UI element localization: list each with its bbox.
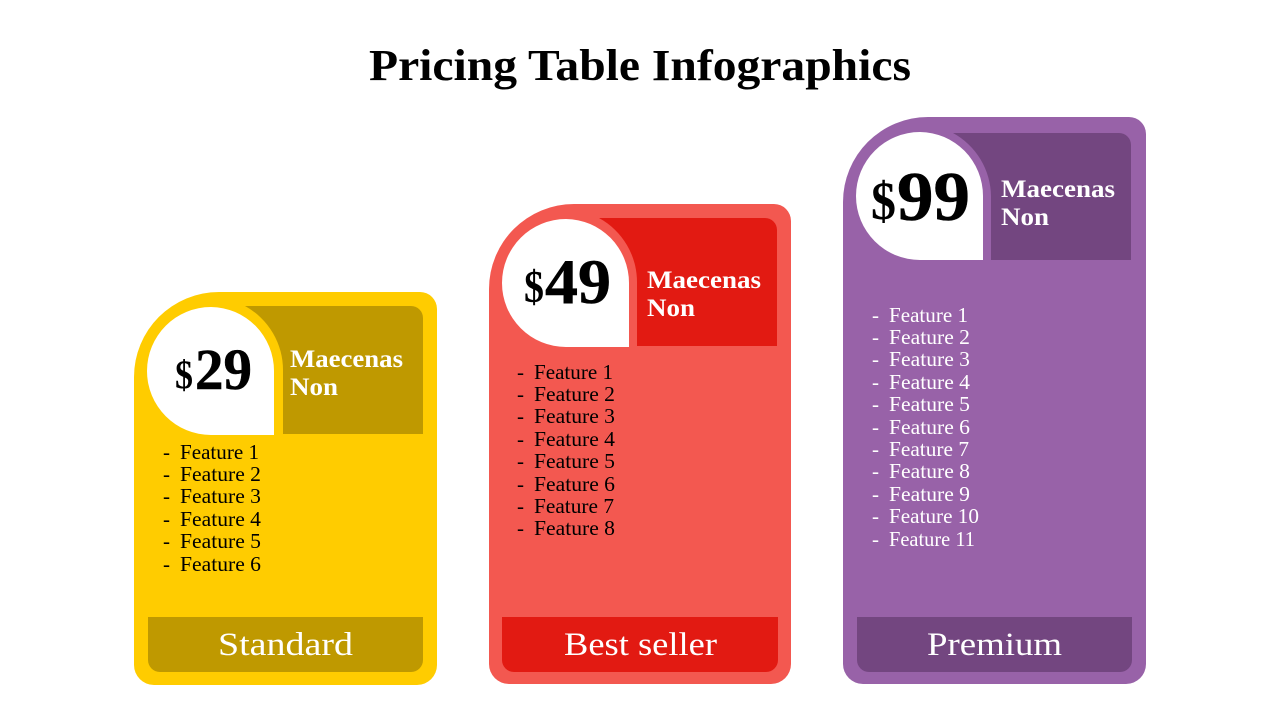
feature list: premium: Feature 10 (889, 504, 979, 528)
footer: best seller (502, 617, 778, 672)
panel: standard (134, 292, 437, 685)
feature list: premium: - (872, 482, 879, 506)
feature list: premium: Feature 3 (889, 347, 970, 371)
price badge: premium: 99 (897, 159, 970, 236)
feature list: standard: - (163, 484, 170, 508)
feature list: best seller: Feature 5 (534, 449, 615, 473)
footer: premium (857, 617, 1132, 672)
price badge: best seller (502, 219, 629, 347)
header label: standard: Non (290, 374, 338, 401)
feature list: premium: - (872, 303, 879, 327)
feature list: premium: Feature 1 (889, 303, 968, 327)
feature list: premium: Feature 8 (889, 459, 970, 483)
feature list: best seller: - (517, 449, 524, 473)
feature list: standard: Feature 4 (180, 507, 261, 531)
feature list: premium: Feature 11 (889, 527, 975, 551)
feature list: premium (872, 303, 979, 551)
feature list: premium: Feature 4 (889, 370, 970, 394)
price badge: standard: 29 (195, 337, 252, 402)
header label: standard: Maecenas (290, 346, 403, 373)
feature list: premium: Feature 5 (889, 392, 970, 416)
feature list: best seller: - (517, 494, 524, 518)
header label: premium: Non (1001, 204, 1049, 231)
feature list: best seller: Feature 3 (534, 404, 615, 428)
header block: best seller (599, 218, 777, 346)
feature list: premium: Feature 9 (889, 482, 970, 506)
footer: premium: Premium (927, 627, 1062, 663)
header block: premium (953, 133, 1131, 260)
price badge: premium (856, 132, 983, 260)
feature list: standard: - (163, 440, 170, 464)
feature list: premium: Feature 7 (889, 437, 969, 461)
feature list: premium: - (872, 437, 879, 461)
feature list: premium: - (872, 527, 879, 551)
feature list: standard: Feature 2 (180, 462, 261, 486)
feature list: best seller (517, 360, 615, 540)
card background: standard (134, 292, 437, 685)
feature list: standard: Feature 5 (180, 529, 261, 553)
feature list: best seller: - (517, 516, 524, 540)
price badge: best seller: 49 (545, 246, 611, 317)
feature list: standard: - (163, 529, 170, 553)
feature list: premium: Feature 6 (889, 415, 970, 439)
price badge: standard: $ (175, 352, 193, 397)
feature list: premium: - (872, 347, 879, 371)
footer: best seller: Best seller (564, 627, 717, 663)
feature list: premium: - (872, 504, 879, 528)
feature list: premium: - (872, 392, 879, 416)
header label: best seller: Non (647, 295, 695, 322)
header label: premium (1001, 176, 1115, 231)
price badge: premium: $ (871, 171, 896, 231)
card background: best seller (489, 204, 791, 684)
feature list: standard: - (163, 552, 170, 576)
feature list: best seller: - (517, 360, 524, 384)
footer: standard (148, 617, 423, 672)
feature list: standard (163, 440, 261, 576)
header label: standard (290, 346, 403, 401)
footer: standard: Standard (218, 627, 354, 663)
panel: best seller (489, 204, 791, 684)
feature list: standard: - (163, 507, 170, 531)
title: Pricing Table Infographics (369, 41, 911, 90)
price badge: best seller: $ (524, 261, 544, 312)
header label: best seller (647, 267, 761, 322)
feature list: standard: Feature 6 (180, 552, 261, 576)
header block: standard (245, 306, 423, 434)
feature list: premium: - (872, 415, 879, 439)
header label: best seller: Maecenas (647, 267, 761, 294)
card background: premium (843, 117, 1146, 684)
feature list: premium: - (872, 459, 879, 483)
feature list: standard: Feature 3 (180, 484, 261, 508)
header label: premium: Maecenas (1001, 176, 1115, 203)
price badge: standard (147, 307, 274, 435)
feature list: premium: - (872, 325, 879, 349)
feature list: best seller: - (517, 404, 524, 428)
feature list: standard: Feature 1 (180, 440, 259, 464)
feature list: premium: - (872, 370, 879, 394)
feature list: best seller: Feature 6 (534, 472, 615, 496)
feature list: best seller: - (517, 382, 524, 406)
feature list: best seller: - (517, 427, 524, 451)
feature list: best seller: Feature 2 (534, 382, 615, 406)
feature list: best seller: Feature 1 (534, 360, 613, 384)
feature list: premium: Feature 2 (889, 325, 970, 349)
feature list: best seller: Feature 8 (534, 516, 615, 540)
feature list: best seller: Feature 4 (534, 427, 615, 451)
feature list: best seller: Feature 7 (534, 494, 614, 518)
feature list: standard: - (163, 462, 170, 486)
panel: premium (843, 117, 1146, 684)
feature list: best seller: - (517, 472, 524, 496)
